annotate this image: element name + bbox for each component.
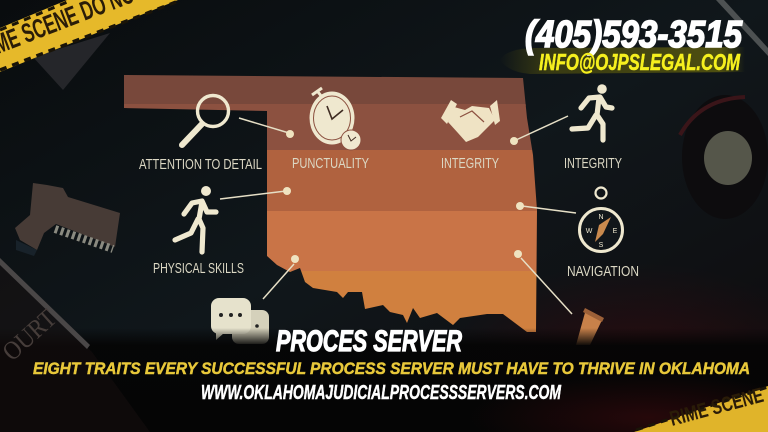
trait: punctuality [292,88,369,172]
connector: attention to detail [239,118,294,138]
icon: compass: N [598,214,604,221]
contact: phone: (405)593-3515 [525,14,743,56]
label: integrity left: INTEGRITY [441,155,499,172]
icon: handshake [441,100,500,142]
object: stamp [15,183,120,256]
icon: magnifying glass [182,96,228,145]
trait: physical skills [153,186,291,277]
connector: document [514,250,572,314]
icon: runner [175,186,216,252]
object: top right stripe [716,0,768,56]
glow: dark red lower right [440,260,768,432]
bottom dark banner [0,328,768,432]
tape: top left [0,0,178,72]
icon: stopwatch [310,88,361,150]
glow: red behind banner [470,360,768,432]
object: folder corner top left [33,33,110,90]
trait: navigation [516,188,639,280]
map of Oklahoma [124,75,537,336]
contact: brush highlight [500,47,745,74]
label: integrity right: INTEGRITY [564,155,622,172]
object: court book [0,258,150,432]
label: navigation: NAVIGATION [567,263,639,280]
connector: communication [263,255,299,299]
label: physical skills: PHYSICAL SKILLS [153,260,244,277]
connector: integrity runner [510,116,568,145]
connector: physical skills [220,187,291,199]
icon: compass: W [586,228,593,235]
connector: navigation [516,202,576,213]
tape: bottom right [634,384,768,432]
website: WWW.OKLAHOMAJUDICIALPROCESSSERVERS.COM [201,382,562,404]
icon: chat bubbles [211,298,269,344]
trait: integrity runner [510,84,622,172]
icon: compass: E [613,228,618,235]
trait: attention to detail [139,96,294,173]
icon: compass [580,188,622,252]
icon: runner [572,84,612,140]
object: wax seal dial [680,95,768,219]
label: punctuality: PUNCTUALITY [292,155,369,172]
icon: clipped document [576,308,604,345]
trait: integrity handshake [441,100,500,172]
icon: compass: S [599,242,604,249]
label: attention to detail: ATTENTION TO DETAIL [139,156,262,173]
title: PROCES SERVER [276,325,462,358]
